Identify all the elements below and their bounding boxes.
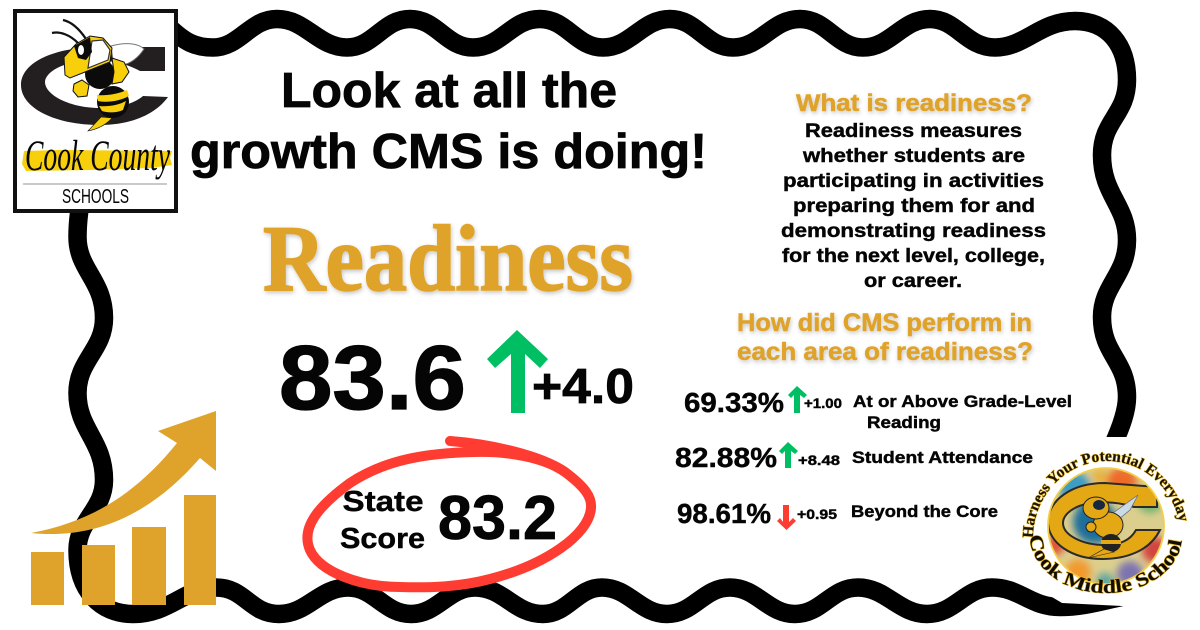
icon: red down arrow xyxy=(777,505,796,530)
row: reading xyxy=(684,386,1072,432)
heading: how did CMS perform xyxy=(737,309,1033,366)
logo letter C xyxy=(21,47,168,125)
icon: large green up arrow xyxy=(487,330,548,413)
title xyxy=(190,64,707,179)
readiness definition: Readiness measures xyxy=(805,120,1022,142)
heading: Readiness: Readiness xyxy=(263,207,633,311)
logo script name: Cook County xyxy=(25,133,171,180)
heading: how did CMS perform: each area of readiness? xyxy=(737,338,1033,366)
badge: Cook Middle School xyxy=(1022,452,1187,594)
row: attendance: 82.88% xyxy=(675,442,777,473)
readiness definition: whether students are xyxy=(802,145,1025,167)
row: attendance xyxy=(675,442,1033,473)
row: beyond the core: Beyond the Core xyxy=(851,502,998,521)
readiness definition: preparing them for and xyxy=(793,195,1035,217)
heading: what is readiness: What is readiness? xyxy=(796,90,1032,117)
icon: up arrow reading xyxy=(788,386,807,413)
frame cutout behind badge xyxy=(1008,437,1200,625)
row: attendance: +8.48 xyxy=(798,452,840,468)
score change: +4.0 xyxy=(532,360,634,414)
badge watercolor disc xyxy=(1049,468,1164,584)
badge bottom name: Cook Middle School xyxy=(1030,535,1182,594)
readiness definition: participating in activities xyxy=(783,170,1044,192)
title: growth CMS is doing! xyxy=(190,125,707,179)
readiness definition: for the next level, college, xyxy=(782,245,1045,267)
row: reading: At or Above Grade-Level xyxy=(853,392,1072,411)
row: beyond the core: +0.95 xyxy=(797,506,837,522)
row: beyond the core xyxy=(677,498,998,530)
logo: Cook County Schools xyxy=(15,11,176,211)
row: reading: Reading xyxy=(867,413,941,432)
readiness definition: demonstrating readiness xyxy=(781,220,1046,242)
title: Look at all the xyxy=(281,64,617,118)
state score: Score xyxy=(340,523,425,555)
icon: growth bar chart with arrow xyxy=(31,411,216,605)
badge top motto: Harness Your Potential Everyday xyxy=(1022,452,1187,538)
heading: how did CMS perform: How did CMS perform in xyxy=(737,309,1032,337)
logo hornet mascot xyxy=(52,20,144,131)
state score: 83.2 xyxy=(438,484,557,553)
row: beyond the core: 98.61% xyxy=(677,498,771,529)
main score: 83.6 xyxy=(279,328,466,429)
icon: up arrow attendance xyxy=(779,442,798,468)
state score: State xyxy=(342,486,424,518)
state score xyxy=(340,484,557,555)
logo divider xyxy=(23,183,167,185)
logo schools label: SCHOOLS xyxy=(62,186,129,208)
badge letter C xyxy=(1048,483,1160,559)
readiness definition: or career. xyxy=(864,270,962,292)
row: attendance: Student Attendance xyxy=(852,448,1033,467)
readiness definition xyxy=(781,120,1046,292)
badge hornet xyxy=(1083,495,1138,558)
logo yellow brush band xyxy=(22,150,172,171)
row: reading: 69.33% xyxy=(684,387,784,418)
icon: red hand-drawn circle xyxy=(307,441,591,587)
row: reading: +1.00 xyxy=(804,395,842,411)
